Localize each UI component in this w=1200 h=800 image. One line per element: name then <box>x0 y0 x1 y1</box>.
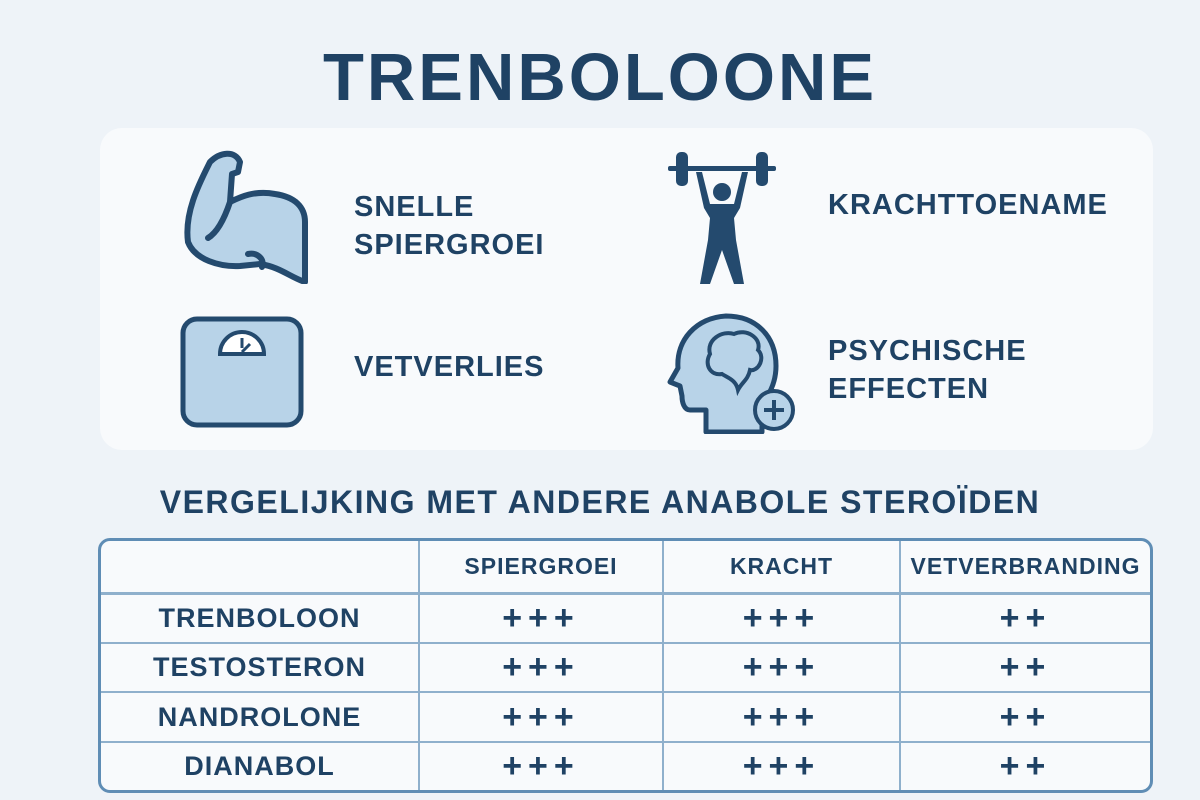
text: snelle spiergroei: SPIERGROEI <box>354 229 544 261</box>
text: psychische effecten: PSYCHISCHE <box>828 335 1027 367</box>
subtitle: VERGELIJKING MET ANDERE ANABOLE STEROÏDEN <box>160 484 1040 520</box>
comparison table: +++ <box>502 599 580 637</box>
comparison table: +++ <box>502 648 580 686</box>
comparison table: TRENBOLOON <box>158 603 360 633</box>
icon: scale <box>180 316 304 428</box>
comparison table: +++ <box>743 698 820 736</box>
comparison table: ++ <box>1000 747 1051 785</box>
text: psychische effecten <box>828 335 1027 405</box>
comparison table: +++ <box>502 698 580 736</box>
comparison table: KRACHT <box>730 553 833 579</box>
comparison table: +++ <box>743 747 820 785</box>
comparison table: ++ <box>1000 648 1051 686</box>
text: snelle spiergroei: SNELLE <box>354 191 474 223</box>
title: TRENBOLOONE <box>323 40 877 115</box>
comparison table: ++ <box>1000 599 1051 637</box>
comparison table: DIANABOL <box>184 751 335 781</box>
comparison table: +++ <box>743 648 820 686</box>
text: vetverlies: VETVERLIES <box>354 351 544 383</box>
comparison table: SPIERGROEI <box>464 553 618 579</box>
comparison table: NANDROLONE <box>158 702 361 732</box>
comparison table <box>98 538 1153 793</box>
text: snelle spiergroei <box>354 191 544 261</box>
panel: benefits <box>100 128 1153 450</box>
text: psychische effecten: EFFECTEN <box>828 373 989 405</box>
icon: head with brain <box>668 314 795 434</box>
comparison table: VETVERBRANDING <box>911 553 1140 579</box>
comparison table: +++ <box>743 599 820 637</box>
comparison table: +++ <box>502 747 580 785</box>
icon: weightlifter <box>668 152 776 284</box>
comparison table: TESTOSTERON <box>153 652 366 682</box>
text: krachttoename: KRACHTTOENAME <box>828 189 1108 221</box>
comparison table: ++ <box>1000 698 1051 736</box>
icon: muscle arm <box>184 150 308 284</box>
